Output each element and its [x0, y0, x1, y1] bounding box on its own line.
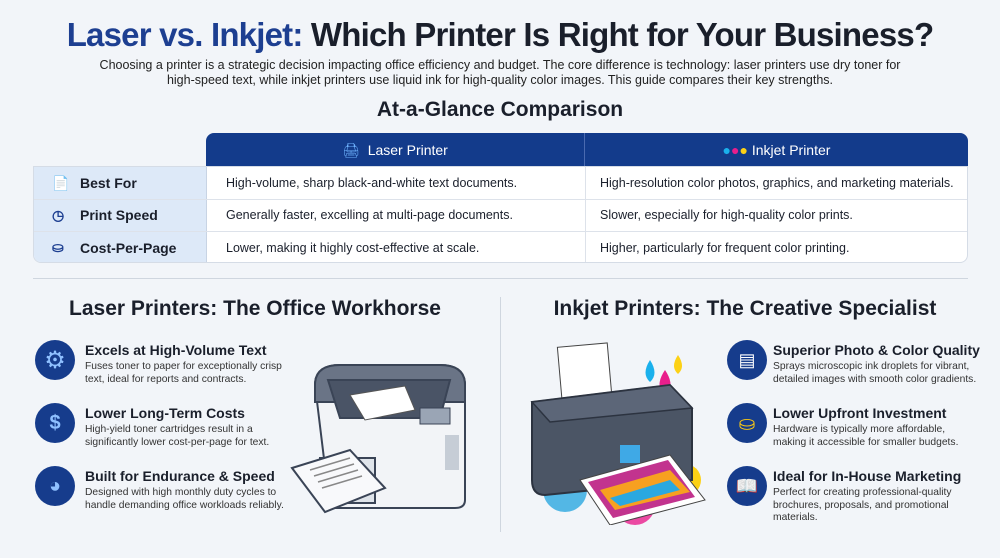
feature: high-volume text: text, ideal for reports and contracts.	[85, 374, 246, 384]
feature: photo quality: Sprays microscopic ink droplets for vibrant,	[773, 361, 969, 372]
subtitle: Choosing a printer is a strategic decision impacting office efficiency and budget. The core difference is technology: laser printers use dry toner for	[100, 58, 900, 72]
feature: upfront: Hardware is typically more affordable,	[773, 424, 945, 435]
feature: marketing: Ideal for In-House Marketing	[773, 468, 961, 484]
row: best for: 📄	[52, 174, 69, 190]
feature: marketing: brochures, proposals, and promotional	[773, 500, 949, 510]
feature: upfront	[727, 403, 958, 448]
feature: photo quality	[727, 340, 980, 384]
subtitle: high-speed text, while inkjet printers use liquid ink for high-quality color images. This guide compares their key strengths.	[167, 73, 833, 87]
comparison table	[33, 133, 968, 263]
feature: marketing: Perfect for creating professional-quality	[773, 487, 952, 498]
feature: costs	[35, 403, 269, 448]
inkjet features	[727, 340, 980, 523]
heading: comparison: At-a-Glance Comparison	[377, 98, 623, 121]
row: print speed: Print Speed	[80, 207, 158, 223]
row: cost per page: ⛀	[52, 239, 64, 255]
feature: costs: $	[49, 412, 61, 434]
subtitle	[100, 58, 900, 87]
feature: photo quality: ▤	[738, 350, 756, 370]
feature: endurance: Built for Endurance & Speed	[85, 468, 275, 484]
illustration: inkjet printer	[530, 342, 706, 525]
row: cost per page: Cost-Per-Page	[80, 240, 176, 256]
feature: costs: Lower Long-Term Costs	[85, 405, 245, 421]
feature: photo quality: Superior Photo & Color Quality	[773, 342, 980, 358]
illustration: laser printer	[290, 364, 466, 514]
table body	[33, 166, 968, 263]
feature: high-volume text	[35, 340, 282, 384]
feature: high-volume text: Fuses toner to paper for exceptionally crisp	[85, 361, 282, 372]
table body: High-volume, sharp black-and-white text documents.	[226, 176, 517, 190]
feature: high-volume text: Excels at High-Volume Text	[85, 342, 267, 358]
feature: photo quality: detailed images with smooth color gradients.	[773, 374, 976, 384]
feature: marketing: materials.	[773, 512, 818, 523]
feature: endurance: Designed with high monthly duty cycles to	[85, 487, 276, 498]
table header	[206, 133, 968, 166]
feature: costs: High-yield toner cartridges result in a	[85, 424, 253, 435]
feature: marketing	[727, 466, 961, 523]
table body: Lower, making it highly cost-effective at scale.	[226, 240, 479, 254]
feature: upfront: making it accessible for smaller budgets.	[773, 436, 958, 448]
feature: costs: significantly lower cost-per-page for text.	[85, 436, 269, 448]
title: Laser vs. Inkjet: Which Printer Is Right for Your Business?	[67, 16, 933, 53]
feature: endurance: ◕	[49, 474, 61, 496]
table body: High-resolution color photos, graphics, and marketing materials.	[600, 176, 954, 190]
laser features	[35, 340, 284, 510]
table header: 🖨 Laser Printer	[342, 142, 448, 158]
feature: endurance: handle demanding office workloads reliably.	[85, 500, 284, 510]
row: best for: Best For	[80, 175, 137, 191]
table header: ●●● Inkjet Printer	[723, 142, 830, 158]
heading: inkjet: Inkjet Printers: The Creative Specialist	[554, 297, 936, 320]
heading: laser: Laser Printers: The Office Workhorse	[69, 297, 441, 320]
row: best for	[52, 174, 137, 191]
row: print speed: ◷	[52, 206, 64, 222]
table body: Generally faster, excelling at multi-page documents.	[226, 208, 513, 222]
feature: endurance	[35, 466, 284, 510]
feature: upfront: ⛀	[739, 412, 755, 434]
table body: Slower, especially for high-quality color prints.	[600, 208, 853, 222]
feature: upfront: Lower Upfront Investment	[773, 405, 946, 421]
table body: Higher, particularly for frequent color printing.	[600, 240, 849, 254]
feature: marketing: 📖	[736, 476, 758, 496]
feature: high-volume text: ⚙	[44, 346, 66, 374]
